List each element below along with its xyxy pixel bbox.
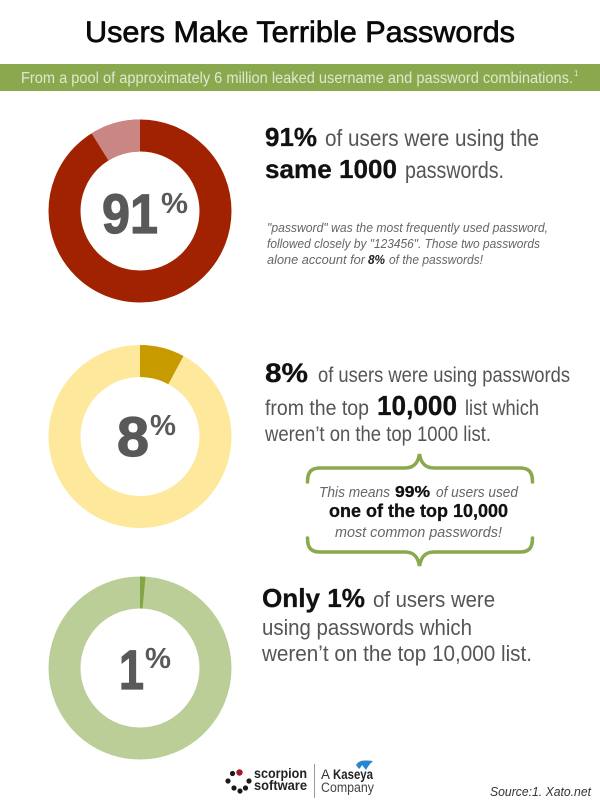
note: most frequent passwords: 8% — [368, 253, 385, 267]
divider — [314, 764, 315, 798]
donut chart: 8%: 8 — [117, 405, 149, 468]
note: most frequent passwords: of the passwords! — [389, 253, 484, 267]
icon: dot ring — [225, 769, 252, 794]
text: 8% statement: weren’t on the top 1000 list. — [264, 422, 491, 446]
donut chart: 1%: % — [145, 643, 171, 675]
callout text: most common passwords! — [335, 524, 503, 541]
donut chart: 1%: 1 — [119, 638, 144, 701]
note: most frequent passwords: followed closely by "123456". Those two passwords — [267, 237, 540, 251]
logo: Kaseya: Kaseya — [333, 767, 373, 782]
source note: Source:1. Xato.net — [490, 784, 592, 799]
text: 1% statement: of users were — [373, 587, 495, 612]
subtitle banner: 1 — [574, 69, 579, 78]
text: 8% statement: 10,000 — [377, 390, 457, 421]
text: 91% statement: passwords. — [405, 157, 504, 183]
callout text: This means — [319, 484, 390, 501]
donut chart: 91% — [64, 120, 216, 286]
logo: Kaseya — [321, 760, 374, 795]
text: 1% statement: Only 1% — [262, 583, 365, 613]
text: 91% statement: of users were using the — [325, 125, 539, 151]
text: 8% statement: from the top — [265, 396, 369, 420]
text: 1% statement: weren’t on the top 10,000 list. — [261, 641, 532, 666]
title: Users Make Terrible Passwords — [85, 16, 515, 49]
bottom brace — [308, 538, 532, 566]
callout text — [319, 484, 519, 541]
callout text: 99% — [395, 484, 430, 501]
logo: scorpion software — [225, 766, 307, 794]
donut chart: 91%: 91 — [102, 182, 158, 245]
icon: Kaseya mark — [356, 760, 373, 770]
donut chart: 1% — [64, 576, 216, 744]
donut chart: 91%: % — [161, 188, 188, 220]
note: most frequent passwords: alone account for — [267, 253, 366, 267]
text: 8% statement — [264, 358, 570, 446]
text: 1% statement: using passwords which — [262, 615, 472, 640]
top brace — [308, 454, 532, 482]
text: 8% statement: list which — [465, 396, 539, 420]
logo: scorpion software: software — [254, 778, 307, 793]
text: 91% statement: 91% — [265, 122, 317, 152]
text: 1% statement — [261, 583, 532, 666]
text: 91% statement — [265, 122, 539, 184]
logo: scorpion software: scorpion — [254, 766, 307, 781]
donut chart: 8% — [64, 345, 216, 512]
logo: Kaseya: A — [321, 767, 330, 782]
logo: Kaseya: Company — [321, 780, 374, 795]
donut chart: 8%: % — [150, 410, 176, 442]
note: most frequent passwords — [267, 221, 548, 267]
note: most frequent passwords: "password" was the most frequently used password, — [267, 221, 548, 235]
text: 91% statement: same 1000 — [265, 154, 397, 184]
text: 8% statement: 8% — [265, 358, 308, 388]
subtitle banner — [0, 64, 600, 91]
callout text: of users used — [436, 484, 519, 501]
callout: 99% of users — [308, 454, 532, 566]
callout text: one of the top 10,000 — [329, 501, 508, 521]
